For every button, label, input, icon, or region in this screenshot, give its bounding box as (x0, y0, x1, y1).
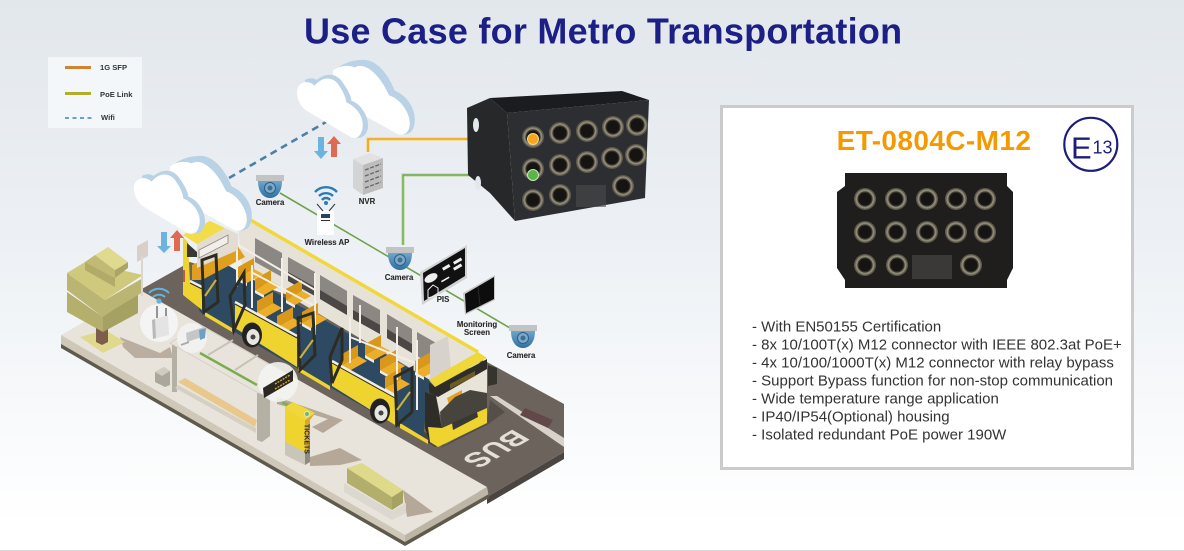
callout: access point (140, 304, 178, 342)
bus poles (237, 235, 417, 410)
ticket kiosk (285, 402, 315, 465)
bus doors (202, 255, 412, 425)
E13 certification badge: 13 (1092, 137, 1113, 157)
legend (48, 57, 142, 128)
bus stop sign (137, 240, 148, 296)
bus stop wifi icon (149, 289, 169, 303)
trash bin (155, 367, 170, 387)
callout: camera (177, 323, 207, 353)
callout: stop display (258, 362, 298, 402)
feature list: - 8x 10/100T(x) M12 connector with IEEE 802.3at PoE+ (752, 336, 1122, 354)
legend: 1G SFP (100, 63, 127, 72)
feature list: - 4x 10/100/1000T(x) M12 connector with relay bypass (752, 354, 1114, 372)
bus partition (430, 336, 451, 380)
camera 3: Camera (507, 351, 536, 360)
camera 2 (385, 247, 414, 282)
legend: Wifi (101, 113, 115, 122)
monitoring screen (457, 275, 497, 337)
bus far wall with windows (238, 218, 480, 380)
camera 2: Camera (385, 273, 414, 282)
feature list: - IP40/IP54(Optional) housing (752, 408, 950, 426)
managed switch: large (467, 91, 649, 221)
cloud: lower (134, 156, 252, 234)
wireless AP (305, 187, 349, 247)
bus shelter (170, 325, 292, 442)
NVR (353, 153, 383, 206)
monitoring screen: Monitoring (457, 320, 497, 329)
link lines (229, 122, 533, 415)
NVR: NVR (359, 197, 376, 206)
bus door handrails (205, 280, 410, 410)
title: Use Case for Metro Transportation (304, 10, 902, 52)
bus front (425, 352, 497, 447)
wireless AP: Wireless AP (305, 238, 349, 247)
bus wheels (242, 322, 390, 424)
tree (67, 247, 143, 353)
product photo: switch front (837, 173, 1013, 288)
bus near side body (183, 237, 428, 444)
ticket kiosk: TICKETS (302, 424, 310, 454)
arrows: upper cloud (314, 136, 341, 159)
product name: ET-0804C-M12 (837, 125, 1031, 156)
E13 certification badge (1064, 118, 1117, 171)
arrows: lower cloud (157, 230, 184, 253)
feature list: - Wide temperature range application (752, 390, 999, 408)
camera 1 (256, 175, 285, 207)
camera 3 (507, 325, 537, 360)
bus seats (192, 245, 440, 396)
PIS screen: PIS (437, 295, 449, 304)
legend: PoE Link (100, 90, 133, 99)
camera 1: Camera (256, 198, 285, 207)
bus (183, 218, 497, 447)
monitoring screen: Screen (464, 328, 490, 337)
feature list: - Support Bypass function for non-stop communication (752, 372, 1113, 390)
bus floor (190, 258, 430, 438)
road marking text: BUS: BUS (455, 425, 536, 472)
feature list (752, 318, 1122, 444)
cloud: upper (297, 60, 415, 138)
isometric road (140, 262, 564, 504)
feature list: - With EN50155 Certification (752, 318, 941, 336)
bus rear end (183, 221, 238, 282)
E13 certification badge: E (1071, 130, 1092, 165)
feature list: - Isolated redundant PoE power 190W (752, 426, 1007, 444)
panel: product card (722, 106, 1132, 468)
PIS screen (420, 245, 467, 305)
planter box (344, 463, 406, 520)
platform (61, 290, 489, 546)
